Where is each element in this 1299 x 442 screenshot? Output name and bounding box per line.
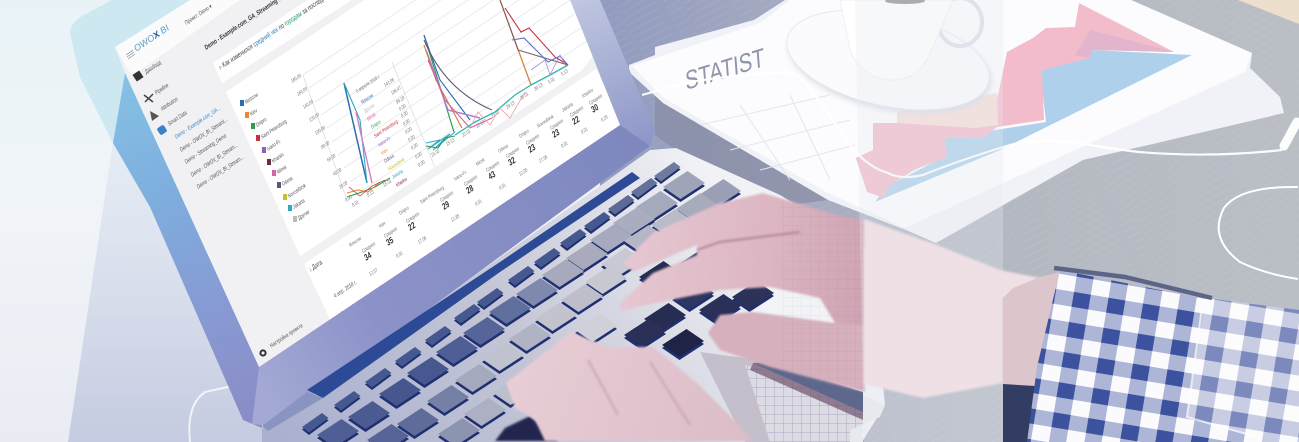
pipeline icon xyxy=(144,94,153,102)
data table: 12,57 xyxy=(368,266,379,277)
translucent vertical band xyxy=(855,0,1003,442)
chart tooltip: 0,00 xyxy=(398,103,407,112)
data table: 35 xyxy=(385,234,395,248)
keyboard xyxy=(302,162,774,442)
chart legend: Novosibirsk xyxy=(287,182,308,200)
chart legend: Kiev xyxy=(249,107,259,118)
stack of papers xyxy=(629,0,1284,243)
sidebar navigation: Дашборд xyxy=(144,60,162,76)
chart on paper: mauve area xyxy=(1075,30,1174,58)
dashboard icon xyxy=(132,70,144,82)
chart y axis labels xyxy=(290,72,353,203)
chart x axis labels: 8.01 xyxy=(351,199,360,208)
dark gap under lower hand xyxy=(495,416,558,441)
chart x axis labels: 22.13 xyxy=(475,118,486,129)
wooden corner top right xyxy=(1238,0,1299,24)
shirt sleeve xyxy=(1182,298,1299,442)
chart on paper: blue area xyxy=(875,50,1192,202)
smart data icon xyxy=(157,125,167,135)
data table: 12,85 xyxy=(450,212,461,223)
statistics heading on paper: STATIST xyxy=(684,43,766,97)
upper hand xyxy=(620,193,865,392)
chart y axis labels: 140,00 xyxy=(302,98,314,110)
function key row xyxy=(302,162,680,435)
sidebar navigation: Smart Data xyxy=(167,110,188,128)
earphone plug xyxy=(1284,122,1297,146)
wrist xyxy=(1003,272,1060,386)
chart tooltip: 141,06 xyxy=(383,76,395,88)
chart tooltip: 0,00 xyxy=(414,151,423,160)
chart y axis labels: 0,00 xyxy=(344,194,353,203)
data table: 17,06 xyxy=(417,234,428,245)
data table: 4 апр. 2018 г. xyxy=(333,279,358,300)
chart x axis labels: 30.01 xyxy=(519,90,530,101)
line chart series xyxy=(344,0,568,197)
chart x axis labels xyxy=(351,68,569,208)
chart legend: Moscow xyxy=(244,91,260,106)
chart legend: Другие xyxy=(297,209,311,222)
chart y axis labels: 180,00 xyxy=(290,72,302,84)
data table: Среднее xyxy=(569,104,584,118)
sidebar navigation: Demo - OWOX_BI_Streami... xyxy=(179,117,229,154)
data table: Среднее xyxy=(439,189,454,203)
chart tooltip: Dnipro xyxy=(370,118,382,130)
sidebar navigation: Demo - OWOX_BI_Stream... xyxy=(196,154,245,191)
chart card xyxy=(226,0,592,256)
chart legend xyxy=(240,91,311,222)
chart y axis labels: 40,00 xyxy=(332,166,343,177)
chart tooltip: 0,00 xyxy=(404,126,413,135)
chart x axis labels: 5.13 xyxy=(560,68,569,77)
chart on paper: pink area xyxy=(856,3,1174,198)
chart tooltip: Другие xyxy=(363,102,376,114)
chart x axis labels: 15.01 xyxy=(382,177,393,188)
building overlay on band xyxy=(780,200,864,390)
cuff seam xyxy=(1054,268,1212,298)
data table: Среднее xyxy=(505,145,520,159)
chart legend: Kharkiv xyxy=(271,151,286,165)
chart legend: Jakarta xyxy=(292,197,306,211)
paper grid xyxy=(700,95,855,180)
data table: 32 xyxy=(507,154,517,168)
data table: 30 xyxy=(590,101,600,115)
chart x axis labels: 30.13 xyxy=(533,81,544,92)
chart tooltip: Minsk xyxy=(366,111,377,122)
data table: 0,29 xyxy=(600,114,609,123)
lid lower edge xyxy=(262,392,323,431)
data table: Odesa xyxy=(497,142,509,154)
data table: 43 xyxy=(487,168,497,182)
data table: 34 xyxy=(363,249,373,263)
data table: 0,01 xyxy=(580,126,589,135)
data table: 29 xyxy=(441,198,451,212)
data table: Среднее xyxy=(485,159,500,173)
coffee cup and saucer xyxy=(778,0,1000,130)
building overlay on trackpad xyxy=(745,362,863,442)
hinge strip xyxy=(307,172,640,398)
chart y axis labels: 80,00 xyxy=(320,139,331,150)
data table: 0,01 xyxy=(560,140,569,149)
chart tooltip: Kharkiv xyxy=(395,176,408,188)
trackpad white patch xyxy=(745,285,845,325)
data table: Среднее xyxy=(361,240,376,254)
sidebar navigation: Demo - Streaming_Demo xyxy=(184,133,228,166)
chart y axis labels: 120,00 xyxy=(308,111,320,123)
fingers and palm xyxy=(620,193,865,325)
trackpad silver wedge xyxy=(700,352,863,442)
data table: 23 xyxy=(527,141,537,155)
data table: Jakarta xyxy=(561,101,574,113)
data table xyxy=(308,87,609,318)
chart tooltip: 0,00 xyxy=(400,110,409,119)
chart y axis labels: 20,00 xyxy=(338,179,349,190)
data table: Kharkiv xyxy=(581,87,594,99)
chart tooltip: Kiev xyxy=(380,146,389,156)
blue lid back xyxy=(113,73,262,428)
chart legend: Odesa xyxy=(281,175,294,188)
data table: 0,01 xyxy=(395,250,404,259)
chart tooltip: Ivano-Fr. xyxy=(377,135,392,148)
chart x axis labels: 8.13 xyxy=(366,189,375,198)
chart gridlines xyxy=(302,0,586,200)
chart tooltip: 0,00 xyxy=(407,134,416,143)
finger crease xyxy=(697,232,800,250)
lower hand xyxy=(506,332,752,441)
data table: Среднее xyxy=(463,173,478,187)
app logo: OWOX BI xyxy=(133,22,170,54)
back of the hand in band xyxy=(864,219,1040,398)
data table: Среднее xyxy=(525,132,540,146)
table card xyxy=(304,69,625,320)
data table: Среднее xyxy=(383,225,398,239)
laptop lid xyxy=(70,0,655,431)
chart tooltip: 0,00 xyxy=(417,159,426,168)
darker desk strip between laptop and paper xyxy=(655,95,828,205)
white desk cable lower left xyxy=(189,386,232,442)
data table: 28 xyxy=(465,182,475,196)
data table: Ivano-Fr. xyxy=(453,169,468,182)
project selector: Проект: Demo ▾ xyxy=(184,3,213,27)
chart tooltip: Saint Petersburg xyxy=(373,118,399,139)
screen background xyxy=(115,0,620,367)
data table: ↓ Дата xyxy=(308,258,324,274)
chart tooltip: 0,00 xyxy=(410,142,419,151)
data table: Moscow xyxy=(348,235,362,248)
chart tooltip: Odesa xyxy=(383,152,395,164)
bottom bezel xyxy=(252,125,650,426)
translucent triangle on desk xyxy=(68,143,270,442)
chart tooltip: 0,00 xyxy=(402,118,411,127)
hamburger menu xyxy=(126,50,135,59)
chart x axis labels: 29.13 xyxy=(505,99,516,110)
dark keys in hand shadow xyxy=(644,303,686,334)
data table: 22 xyxy=(407,219,417,233)
sidebar navigation: Attribution xyxy=(160,96,179,113)
top bar xyxy=(115,0,240,76)
sidebar navigation: Demo - Example.com_GA... xyxy=(174,105,222,141)
chart x axis labels: 5.01 xyxy=(547,76,556,85)
sidebar navigation: Demo - OWOX_BI_Stream... xyxy=(190,142,239,179)
data table: Minsk xyxy=(475,156,486,167)
chart tooltip: 106,47 xyxy=(390,84,402,96)
chart y axis labels: 100,00 xyxy=(314,124,326,136)
home key row xyxy=(702,179,741,206)
data table: Kiev xyxy=(378,219,387,229)
desk: grey right side xyxy=(600,0,1299,442)
chart x axis labels: 22.01 xyxy=(461,127,472,138)
chart tooltip: Jakarta xyxy=(391,168,404,180)
second cable right xyxy=(1219,187,1298,279)
lower key row xyxy=(575,314,617,345)
data table: 22 xyxy=(571,113,581,127)
base corner right of band xyxy=(850,395,885,442)
chart y axis labels: 160,00 xyxy=(296,85,308,97)
shirt cuff xyxy=(1027,270,1257,442)
earphone cable xyxy=(642,72,1282,177)
data table: Saint Petersburg xyxy=(419,184,445,205)
data table: 12,05 xyxy=(518,166,529,177)
attribution icon xyxy=(150,111,159,121)
settings gear icon xyxy=(260,350,266,356)
chart legend: Dnipro xyxy=(255,116,268,129)
data table: 0,01 xyxy=(498,182,507,191)
data table: 17,06 xyxy=(538,153,549,164)
sidebar navigation xyxy=(132,60,304,356)
data table: 3 апр. 2018 г. xyxy=(340,297,365,318)
chart tooltip: 5 апреля 2018 г. xyxy=(355,73,381,94)
data table: Novosibirsk xyxy=(536,113,555,129)
chart legend: Ivano-Fr. xyxy=(266,138,282,153)
chart tooltip: 99,18 xyxy=(395,94,406,105)
data table: Среднее xyxy=(549,117,564,131)
chart x axis labels: 15.13 xyxy=(445,136,456,147)
shadow under wrist xyxy=(1003,384,1035,442)
chart legend: Minsk xyxy=(276,164,288,176)
sidebar navigation: Pipeline xyxy=(154,82,170,97)
chart y axis labels: 60,00 xyxy=(326,152,337,163)
sidebar navigation: Настройка проекта xyxy=(269,321,304,350)
chart on paper: peach area xyxy=(897,93,998,128)
data table: 0,01 xyxy=(474,198,483,207)
lower hand finger creases xyxy=(588,360,690,425)
data table: Среднее xyxy=(405,210,420,224)
data table: 23 xyxy=(551,126,561,140)
data table: Среднее xyxy=(588,92,603,106)
search bar xyxy=(213,0,352,83)
number key row xyxy=(663,171,705,202)
chart tooltip: Novosibirsk xyxy=(387,156,406,172)
data table: Dnipro xyxy=(398,204,410,216)
data table: Dnipro xyxy=(518,127,530,139)
laptop base and trackpad xyxy=(262,148,885,442)
chart x axis labels: 15.01 xyxy=(430,147,441,158)
chart legend: Saint Petersburg xyxy=(260,118,288,141)
right lid edge xyxy=(570,0,655,146)
chart x axis labels: 29.01 xyxy=(490,108,501,119)
laptop screen xyxy=(115,0,620,367)
chart tooltip xyxy=(355,73,426,188)
thumb xyxy=(708,312,865,392)
pale upper lid xyxy=(70,0,200,143)
chart tooltip: Moscow xyxy=(360,92,374,105)
